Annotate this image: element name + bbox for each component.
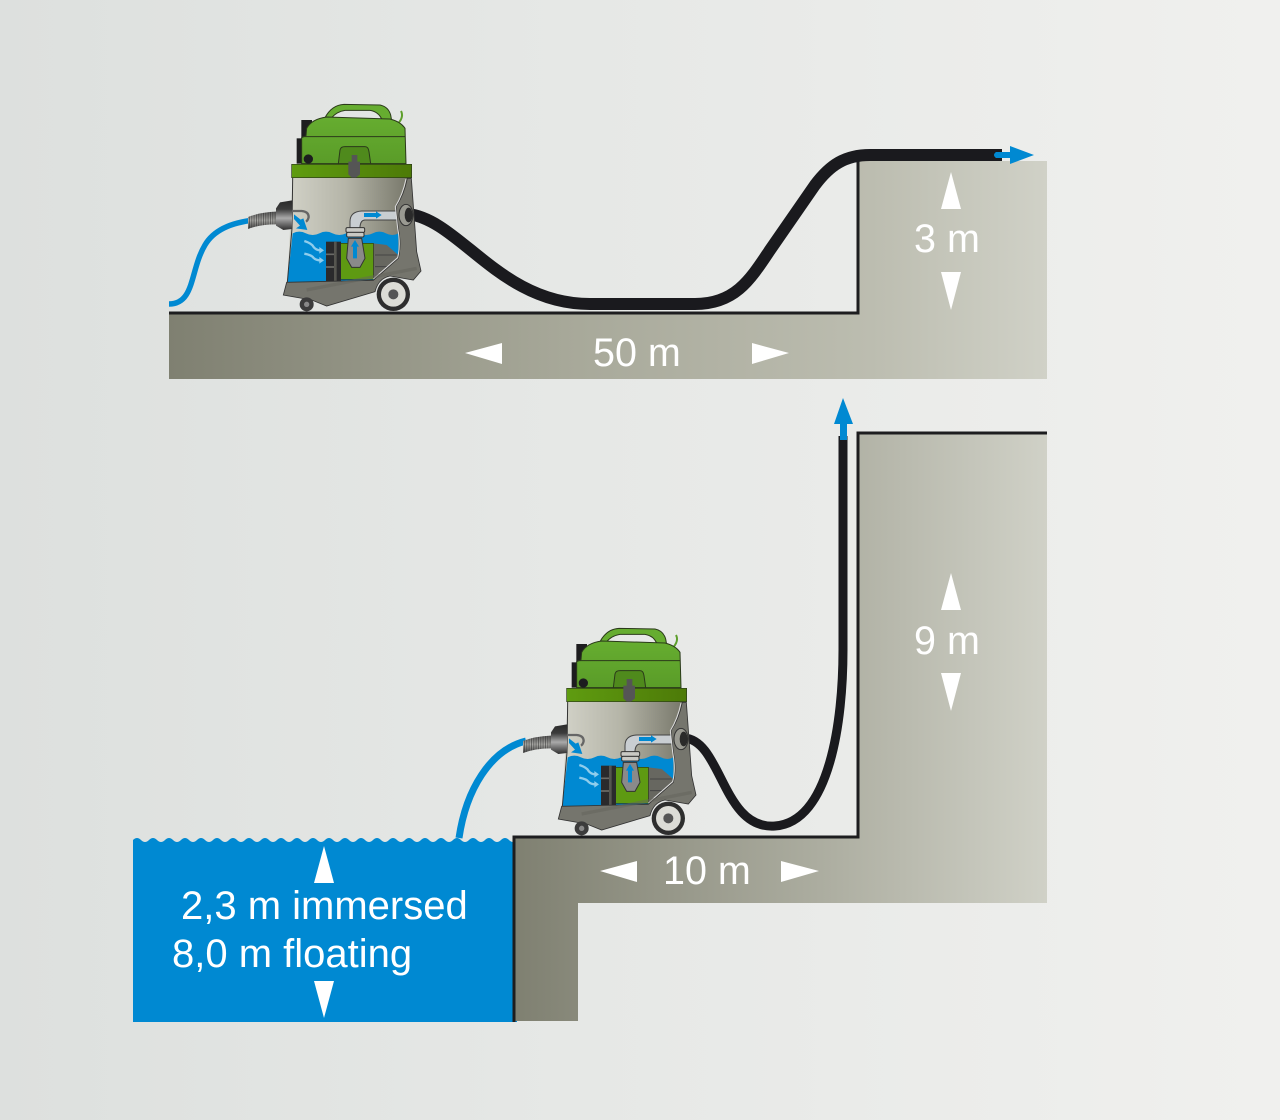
pump shell and base [558, 702, 696, 830]
pump water [562, 756, 673, 806]
pump rim [292, 164, 412, 178]
pump inlet connector [523, 724, 584, 754]
top outlet arrow [994, 146, 1034, 164]
pump lid [297, 104, 406, 164]
bottom discharge hose (black) [684, 436, 843, 826]
dimension: 10 m [600, 849, 819, 893]
pump flow arrows [579, 765, 599, 788]
dimension: 50 m [465, 331, 789, 375]
dimension: 50 m: 50 m [593, 331, 681, 375]
water reservoir [133, 838, 525, 1022]
pump internal motor [326, 242, 398, 281]
pump wheels [300, 278, 410, 311]
dimension: 3 m [914, 172, 980, 310]
dimension: 10 m: 10 m [663, 849, 751, 893]
pump clip [623, 679, 635, 702]
pump tank wall [287, 178, 293, 282]
pump rim [567, 688, 687, 702]
pump outlet connector [399, 204, 413, 226]
pump: bottom [523, 628, 696, 835]
pump water [287, 232, 398, 282]
dimension: 9 m: 9 m [914, 619, 980, 663]
pump tank [562, 702, 692, 806]
top suction hose (blue) [169, 220, 255, 304]
pump shell and base [283, 178, 421, 306]
pump riser pipe [346, 211, 398, 267]
pump lid [572, 628, 681, 688]
pump: top [248, 104, 421, 311]
pump clip [348, 155, 360, 178]
bottom outlet arrow [834, 398, 853, 440]
pump outlet connector [674, 728, 688, 750]
pump inlet connector [248, 200, 309, 230]
top discharge hose (black) [408, 155, 1002, 304]
upper ground: 50 m run and 3 m step [169, 161, 1047, 379]
dimension: immersed and floating depth [172, 846, 468, 1018]
pump tank [287, 178, 417, 282]
pump wheels [575, 802, 685, 835]
pump flow arrows [304, 241, 324, 264]
dimension: immersed and floating depth: 8,0 m floating [172, 932, 412, 976]
pump riser pipe [621, 735, 673, 791]
pump tank wall [562, 702, 568, 806]
dimension: 9 m [914, 573, 980, 711]
pump internal motor [601, 766, 673, 805]
lower ground: 10 m run and 9 m wall [514, 433, 1047, 1022]
bottom suction hose (blue) [459, 741, 526, 838]
dimension: immersed and floating depth: 2,3 m immersed [181, 884, 468, 928]
dimension: 3 m: 3 m [914, 217, 980, 261]
